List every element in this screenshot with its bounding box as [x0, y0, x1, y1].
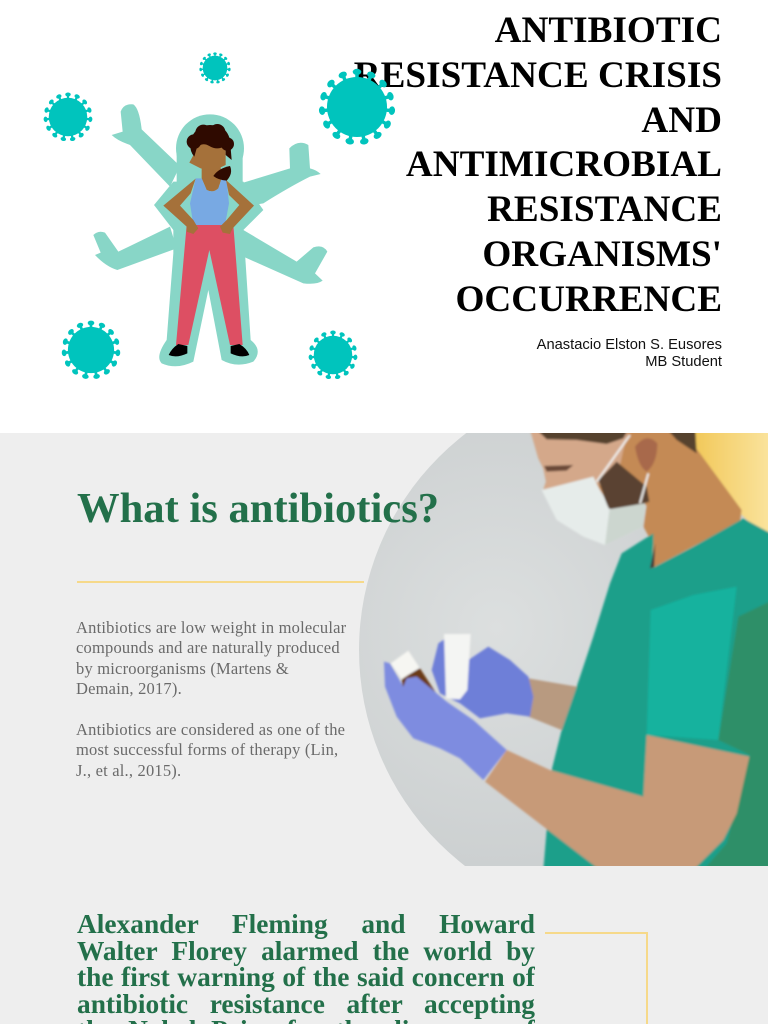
beard	[598, 462, 649, 512]
title: ANTIMICROBIAL	[406, 144, 722, 185]
icon: virus top	[199, 52, 231, 84]
top	[190, 178, 229, 225]
neck	[202, 160, 222, 191]
head and neck skin	[596, 433, 742, 568]
author credit	[536, 337, 722, 370]
body text: Antibiotics are considered as one of the	[76, 720, 345, 739]
collar shadow	[650, 543, 655, 568]
near glove	[384, 662, 507, 780]
body text: Demain, 2017).	[76, 679, 182, 698]
shoes	[169, 344, 249, 356]
title: OCCURRENCE	[455, 279, 722, 320]
author credit: MB Student	[645, 354, 722, 370]
yellow backdrop	[694, 433, 768, 534]
sleeve	[647, 587, 737, 740]
hair	[187, 124, 234, 181]
far forearm	[528, 678, 577, 730]
title: RESISTANCE CRISIS	[354, 55, 722, 96]
dark green panel	[703, 597, 768, 870]
white cap	[391, 651, 419, 679]
scrub top	[543, 518, 768, 870]
icon: virus bottom right	[308, 330, 358, 380]
brown bottle	[402, 668, 438, 711]
heading: What is antibiotics?	[77, 485, 439, 532]
surgical mask	[542, 477, 645, 545]
face	[530, 433, 628, 490]
body text: most successful forms of therapy (Lin,	[76, 740, 338, 759]
face	[189, 143, 226, 169]
Fleming statement: the first warning of the said concern of	[77, 962, 535, 992]
white bottle	[444, 634, 471, 699]
ear	[635, 438, 657, 472]
title	[354, 10, 722, 320]
eye brow	[544, 465, 573, 472]
title: AND	[641, 100, 722, 141]
photo: medic in scrubs holding pill bottles, in a circle crop	[359, 433, 768, 866]
body text	[76, 618, 346, 780]
shadow arms and halo	[93, 104, 327, 366]
title: RESISTANCE	[487, 189, 722, 230]
far glove	[432, 637, 533, 718]
body text: by microorganisms (Martens &	[76, 659, 289, 678]
legs	[176, 225, 243, 345]
Fleming statement: Walter Florey alarmed the world by	[77, 936, 535, 966]
near forearm	[485, 735, 749, 870]
mask straps	[597, 435, 648, 503]
body text: Antibiotics are low weight in molecular	[76, 618, 346, 637]
icon: virus large right	[319, 69, 395, 145]
Fleming statement	[77, 911, 535, 1024]
author credit: Anastacio Elston S. Eusores	[537, 337, 722, 353]
illustration: woman with virus particles	[44, 52, 395, 379]
body text: compounds and are naturally produced	[76, 638, 340, 657]
section background	[0, 433, 768, 1024]
title: ORGANISMS'	[482, 234, 722, 275]
icon: virus bottom left	[61, 321, 121, 379]
title: ANTIBIOTIC	[495, 10, 722, 51]
hair	[538, 433, 698, 454]
arms	[163, 179, 254, 234]
figure: woman with shadow arms	[93, 104, 327, 366]
body text: J., et al., 2015).	[76, 761, 181, 780]
Fleming statement: antibiotic resistance after accepting	[77, 989, 535, 1019]
divider line	[77, 581, 364, 583]
icon: virus left	[43, 92, 93, 142]
